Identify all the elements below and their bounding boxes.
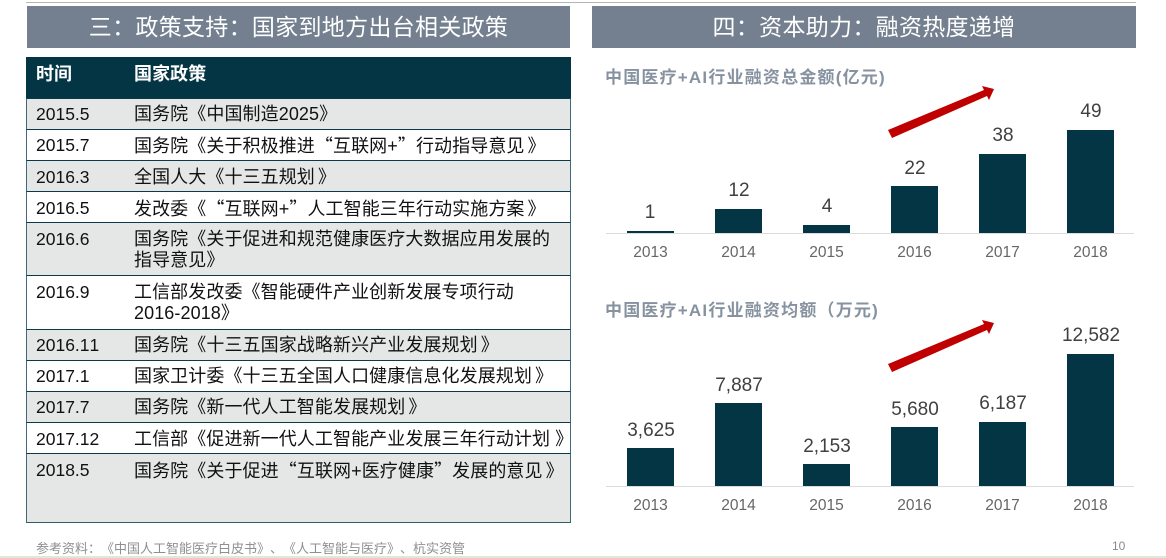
heading: policy support: 三：政策支持：国家到地方出台相关政策: [89, 14, 508, 40]
arrow: upward trend: [888, 86, 994, 138]
value labels: 6,187: [979, 393, 1027, 414]
year labels: 2018: [1073, 497, 1108, 514]
table header row: 时间: [36, 64, 72, 84]
year labels: 2017: [985, 497, 1020, 514]
value labels: 22: [904, 158, 926, 179]
value labels: 7,887: [715, 375, 763, 396]
source note: 参考资料：《中国人工智能医疗白皮书》、《人工智能与医疗》、杭实资管: [36, 541, 465, 556]
year labels: 2013: [633, 244, 668, 261]
value labels: [645, 101, 1102, 223]
heading: capital support: [592, 6, 1136, 48]
value labels: 38: [992, 125, 1014, 146]
chart title: 中国医疗+AI行业融资总金额(亿元): [605, 67, 886, 87]
row 2016.9: [26, 275, 571, 329]
row 2018.5: [26, 453, 571, 523]
bars: [627, 130, 1114, 233]
year labels: 2013: [633, 497, 668, 514]
row 2016.3: 2016.3: [36, 167, 90, 187]
row 2017.12: [26, 422, 571, 453]
heading: policy support: [27, 6, 570, 48]
row 2016.11: [26, 329, 571, 360]
row 2016.6: 国务院《关于促进和规范健康医疗大数据应用发展的: [134, 229, 550, 249]
year labels: 2014: [721, 244, 756, 261]
chart: total financing: [605, 67, 1134, 261]
year labels: 2015: [809, 497, 844, 514]
row 2016.6: 指导意见》: [134, 250, 224, 270]
row 2018.5: 2018.5: [36, 460, 90, 480]
row 2017.12: 2017.12: [36, 429, 99, 449]
row 2016.6: 2016.6: [36, 229, 90, 249]
row 2016.9: 工信部发改委《智能硬件产业创新发展专项行动: [134, 282, 514, 302]
year labels: 2016: [897, 244, 932, 261]
row 2016.5: 2016.5: [36, 198, 90, 218]
row 2015.7: 2015.7: [36, 135, 90, 155]
row 2016.6: [26, 222, 571, 275]
row 2016.11: 2016.11: [36, 335, 99, 355]
row 2015.5: 国务院《中国制造2025》: [134, 104, 337, 124]
bottom strip: [0, 556, 1166, 558]
year labels: [633, 497, 1108, 514]
year labels: 2018: [1073, 244, 1108, 261]
row 2015.7: 国务院《关于积极推进“互联网+”行动指导意见》: [134, 132, 546, 158]
row 2017.1: [26, 360, 571, 391]
value labels: 12: [728, 180, 750, 201]
row 2016.9: 2016.9: [36, 282, 90, 302]
row 2018.5: 国务院《关于促进“互联网+医疗健康”发展的意见》: [134, 457, 564, 483]
row 2016.11: 国务院《十三五国家战略新兴产业发展规划》: [134, 335, 499, 355]
row 2016.3: 全国人大《十三五规划》: [134, 167, 336, 187]
chart title: 中国医疗+AI行业融资均额（万元): [605, 300, 879, 320]
row 2016.9: 2016-2018》: [134, 303, 239, 323]
value labels: 3,625: [627, 420, 675, 441]
page number: 10: [1112, 539, 1125, 553]
year labels: 2015: [809, 244, 844, 261]
row 2015.5: [26, 98, 571, 129]
value labels: [627, 325, 1120, 457]
top rule: [26, 2, 1136, 3]
value labels: 1: [645, 202, 655, 223]
row 2016.5: [26, 191, 571, 222]
row 2017.7: 2017.7: [36, 397, 90, 417]
value labels: 49: [1080, 101, 1102, 122]
year labels: 2016: [897, 497, 932, 514]
year labels: 2017: [985, 244, 1020, 261]
row 2017.7: [26, 391, 571, 422]
year labels: 2014: [721, 497, 756, 514]
row 2017.1: 2017.1: [36, 366, 90, 386]
row 2017.1: 国家卫计委《十三五全国人口健康信息化发展规划》: [134, 366, 553, 386]
row 2015.5: 2015.5: [36, 104, 90, 124]
arrow: upward trend: [888, 320, 994, 372]
value labels: 2,153: [803, 436, 851, 457]
value labels: 12,582: [1062, 325, 1120, 346]
panel: policy table: [26, 57, 573, 523]
row 2017.12: 工信部《促进新一代人工智能产业发展三年行动计划 》: [134, 429, 573, 449]
year labels: [633, 244, 1108, 261]
chart: average financing: [605, 300, 1134, 514]
table header row: 国家政策: [134, 64, 206, 84]
bars: [627, 354, 1114, 486]
row 2017.7: 国务院《新一代人工智能发展规划》: [134, 397, 426, 417]
row 2016.3: [26, 160, 571, 191]
row 2015.7: [26, 129, 571, 160]
row 2016.5: 发改委《“互联网+”人工智能三年行动实施方案》: [134, 195, 546, 221]
value labels: 4: [822, 196, 833, 217]
heading: capital support: 四：资本助力：融资热度递增: [713, 14, 1015, 40]
value labels: 5,680: [891, 399, 939, 420]
table header row: [26, 57, 571, 98]
